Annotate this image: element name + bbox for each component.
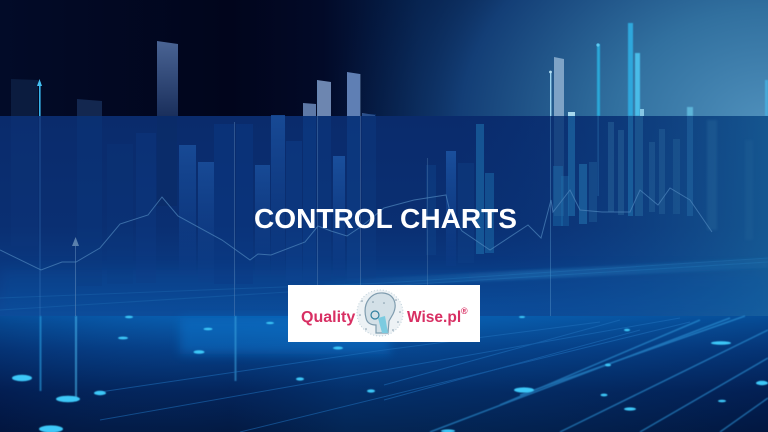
line chart (0, 188, 712, 270)
vertical indicator lines with arrows (37, 43, 600, 401)
bar chart right: upper portions (554, 23, 768, 116)
title: CONTROL CHARTS (254, 203, 517, 234)
middle band (0, 116, 768, 316)
logo wordmark left: Quality (301, 309, 355, 326)
logo wordmark right: Wise.pl (407, 309, 461, 326)
bar chart right: portions inside the band (426, 116, 753, 266)
logo icon: brain network globe (357, 290, 403, 336)
bar chart left: portions inside the band (11, 114, 376, 286)
horizon glow on the right (300, 258, 768, 290)
floor perspective (0, 270, 768, 432)
logo: Quality Wise.pl (288, 285, 480, 342)
logo background (288, 285, 480, 342)
bar chart left: upper portions above the band (11, 41, 375, 116)
logo registered mark: ® (461, 306, 468, 316)
perspective lines and glowing points on the floor (0, 258, 768, 432)
